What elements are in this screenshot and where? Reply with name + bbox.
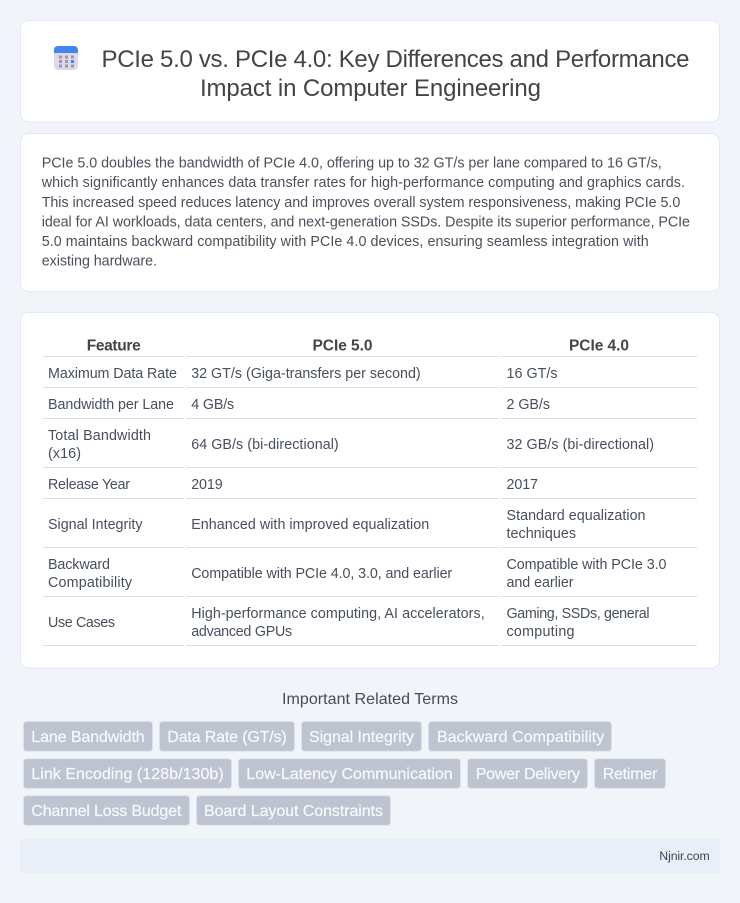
- footer: [20, 839, 720, 873]
- tag: signal integrity: [302, 722, 422, 751]
- tag: board layout constraints: [196, 796, 390, 825]
- row: use cases: computing: [506, 624, 575, 640]
- tag: retimer: Retimer: [603, 766, 658, 783]
- row: signal integrity: Signal Integrity: [48, 517, 143, 533]
- row: backward compatibility: and earlier: [506, 575, 574, 591]
- tag: backward compatibility: Backward Compatibility: [437, 729, 604, 746]
- row: release year: Release Year: [48, 477, 130, 493]
- row: bandwidth per lane: [43, 397, 697, 419]
- tag: power delivery: [468, 759, 588, 788]
- row: maximum data rate: Maximum Data Rate: [48, 366, 177, 382]
- row: total bandwidth: 32 GB/s (bi-directional): [506, 437, 654, 453]
- heading: important related terms: Important Related Terms: [282, 691, 458, 708]
- tag: retimer: [594, 759, 666, 788]
- row: signal integrity: [43, 508, 697, 548]
- icon: calendar: [54, 46, 78, 70]
- row: release year: 2017: [506, 477, 538, 493]
- row: release year: [43, 477, 697, 499]
- tag: low-latency communication: [238, 759, 460, 788]
- tag: channel loss budget: [24, 796, 190, 825]
- footer: Njnir.com: [659, 849, 710, 863]
- tag: link encoding: [24, 759, 232, 788]
- panel: title card: [20, 20, 720, 122]
- tag: low-latency communication: Low-Latency Communication: [246, 766, 453, 783]
- row: backward compatibility: Compatibility: [48, 575, 133, 591]
- row: maximum data rate: 16 GT/s: [506, 366, 558, 382]
- title: PCIe 5.0 vs. PCIe 4.0: Key Differences and Performance: [102, 46, 690, 73]
- title: Impact in Computer Engineering: [200, 75, 541, 102]
- text block: summary paragraph: 5.0 maintains backward compatibility with PCIe 4.0 devices, ensuring seamless integration with: [42, 234, 649, 250]
- row: backward compatibility: Compatible with PCIe 3.0: [506, 557, 667, 573]
- row: total bandwidth: 64 GB/s (bi-directional): [191, 437, 339, 453]
- table header row: [43, 338, 697, 357]
- text block: summary paragraph: [41, 156, 690, 270]
- tag: power delivery: Power Delivery: [476, 766, 580, 783]
- row: signal integrity: Enhanced with improved equalization: [191, 517, 429, 533]
- tag: lane bandwidth: Lane Bandwidth: [31, 729, 145, 746]
- tag: channel loss budget: Channel Loss Budget: [31, 803, 182, 820]
- row: total bandwidth: [43, 428, 697, 468]
- row: bandwidth per lane: Bandwidth per Lane: [48, 397, 174, 413]
- row: use cases: Gaming, SSDs, general: [506, 606, 650, 622]
- text block: summary paragraph: which significantly enhances data transfer rates for high-performance computing and graphics cards.: [41, 175, 685, 191]
- table header row: PCIe 5.0: [312, 338, 372, 355]
- panel: summary: [20, 134, 720, 292]
- row: signal integrity: techniques: [506, 526, 576, 542]
- panel: comparison table: [20, 312, 720, 668]
- row: backward compatibility: Compatible with PCIe 4.0, 3.0, and earlier: [191, 566, 452, 582]
- text block: summary paragraph: existing hardware.: [42, 254, 157, 270]
- row: total bandwidth: Total Bandwidth: [48, 428, 151, 444]
- title: [102, 46, 690, 102]
- row: release year: 2019: [191, 477, 223, 493]
- tag: link encoding: Link Encoding (128b/130b): [31, 766, 224, 783]
- tag: backward compatibility: [428, 722, 612, 751]
- tag: data rate: [160, 722, 294, 751]
- tag: data rate: Data Rate (GT/s): [167, 729, 287, 746]
- tag: lane bandwidth: [24, 722, 152, 751]
- row: use cases: [43, 606, 697, 646]
- tag: board layout constraints: Board Layout Constraints: [204, 803, 383, 820]
- row: bandwidth per lane: 4 GB/s: [191, 397, 234, 413]
- row: maximum data rate: 32 GT/s (Giga-transfers per second): [191, 366, 421, 382]
- tag list: related terms: [24, 722, 666, 825]
- row: backward compatibility: [43, 557, 697, 597]
- row: backward compatibility: Backward: [48, 557, 110, 573]
- row: bandwidth per lane: 2 GB/s: [506, 397, 550, 413]
- table header row: PCIe 4.0: [569, 338, 629, 355]
- row: maximum data rate: [43, 366, 697, 388]
- row: use cases: Use Cases: [48, 615, 115, 631]
- text block: summary paragraph: PCIe 5.0 doubles the bandwidth of PCIe 4.0, offering up to 32 GT/s per lane compared to 16 GT/s,: [42, 156, 662, 172]
- row: use cases: advanced GPUs: [191, 624, 292, 640]
- row: signal integrity: Standard equalization: [506, 508, 646, 524]
- text block: summary paragraph: This increased speed reduces latency and improves overall system responsiveness, making PCIe 5.0: [42, 195, 680, 211]
- row: use cases: High-performance computing, AI accelerators,: [191, 606, 485, 622]
- table header row: Feature: [87, 338, 141, 355]
- row: total bandwidth: (x16): [48, 446, 81, 462]
- tag: signal integrity: Signal Integrity: [309, 729, 414, 746]
- text block: summary paragraph: ideal for AI workloads, data centers, and next-generation SSDs. Despite its superior performance, PCIe: [42, 214, 690, 230]
